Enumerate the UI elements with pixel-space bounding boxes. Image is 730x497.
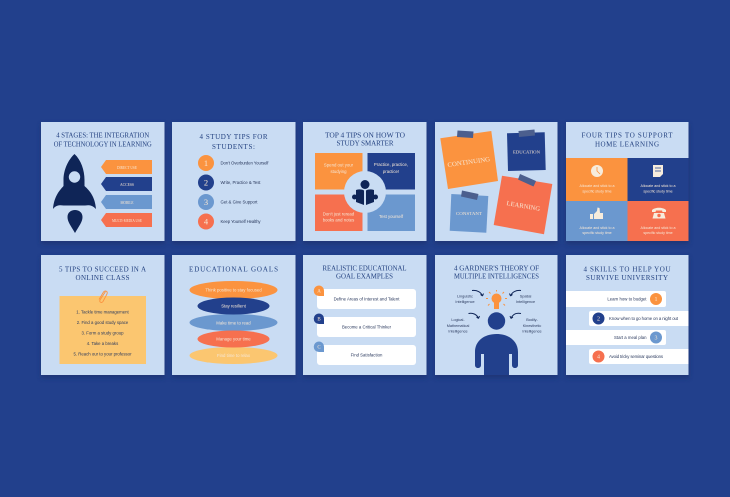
icon: paperclip bbox=[99, 291, 107, 302]
tip box: practice bbox=[368, 153, 415, 190]
arrow banner: multi-media use: MULTI-MEDIA USE bbox=[112, 219, 143, 223]
goal ellipse 5: Find time to relax bbox=[217, 353, 251, 358]
heading: home learning bbox=[582, 132, 673, 148]
goal ellipse 4: Manage your time bbox=[216, 336, 251, 342]
heading: home learning: HOME LEARNING bbox=[595, 140, 659, 148]
tip box: practice: Practice, practice, bbox=[374, 162, 408, 167]
note: education: EDUCATION bbox=[513, 150, 541, 154]
tile: clock: specific study time bbox=[582, 190, 612, 194]
label: linguistic: Linguistic bbox=[457, 294, 473, 298]
list item 3 bbox=[198, 194, 258, 210]
heading: study smarter: TOP 4 TIPS ON HOW TO bbox=[325, 132, 405, 140]
list item 4: Keep Yourself Healthy bbox=[220, 219, 261, 224]
list item 3: 3 bbox=[204, 197, 208, 207]
arrows bbox=[468, 290, 521, 318]
panel: 5 tips to succeed in online class bbox=[41, 255, 164, 375]
skill row 2: Know when to go home on a night out bbox=[609, 316, 679, 321]
panel: sticky notes bbox=[435, 122, 558, 241]
panel: 4 study tips for students bbox=[172, 122, 296, 241]
list item 4 bbox=[198, 214, 261, 230]
tip box: practice: practice! bbox=[383, 169, 399, 174]
icon: reader badge bbox=[344, 171, 386, 213]
heading: study tips: STUDENTS: bbox=[212, 143, 255, 151]
note: continuing: CONTINUING bbox=[447, 156, 491, 169]
list item 2 bbox=[198, 174, 261, 190]
heading: online class: 5 TIPS TO SUCCEED IN A bbox=[59, 266, 146, 274]
tile: telephone bbox=[628, 201, 688, 241]
heading: study smarter: STUDY SMARTER bbox=[336, 140, 394, 148]
heading: goal examples bbox=[322, 264, 406, 280]
heading: 4 stages: 4 STAGES: THE INTEGRATION bbox=[56, 132, 149, 140]
heading: home learning: FOUR TIPS TO SUPPORT bbox=[582, 132, 673, 140]
skill row 2: 2 bbox=[597, 316, 600, 322]
goal row B: B bbox=[317, 318, 321, 322]
tile: notes: specific study time bbox=[643, 190, 673, 194]
panel: educational goals bbox=[172, 255, 296, 375]
skill row 4 bbox=[589, 349, 688, 364]
heading: 4 stages: OF TECHNOLOGY IN LEARNING bbox=[54, 140, 152, 148]
skill row 1: Learn how to budget bbox=[607, 296, 647, 302]
goal row A bbox=[314, 286, 416, 309]
icon: light bulb bbox=[486, 290, 507, 309]
label: logical-mathematical: Intelligence bbox=[448, 330, 468, 334]
heading: study tips: 4 STUDY TIPS FOR bbox=[200, 133, 268, 141]
panel: 4 skills to help you survive university bbox=[566, 255, 688, 375]
goal row A: Define Areas of Interest and Talent bbox=[334, 296, 400, 302]
goal row C bbox=[314, 342, 416, 365]
label: linguistic: Intelligence bbox=[455, 300, 475, 304]
list item 1 bbox=[198, 155, 269, 171]
yellow note list: 2. Find a good study space bbox=[77, 320, 129, 325]
panel: top 4 tips on how to study smarter bbox=[303, 122, 426, 241]
skill row 1 bbox=[566, 291, 666, 307]
tip box: don't just reread: books and notes bbox=[323, 218, 354, 222]
goal row C: C bbox=[317, 346, 321, 350]
yellow note list: 4. Take a breaks bbox=[87, 341, 118, 346]
tile: notes bbox=[628, 158, 688, 201]
heading: goals: EDUCATIONAL GOALS bbox=[189, 266, 278, 274]
goal row B: Become a Critical Thinker bbox=[342, 324, 392, 330]
heading: multiple intelligences: MULTIPLE INTELLIGENCES bbox=[454, 272, 539, 280]
list item 1: Don't Overburden Yourself bbox=[220, 160, 269, 166]
label: bodily-kinesthetic: Bodily- bbox=[526, 318, 538, 322]
list item 2: Write, Practice & Test bbox=[220, 180, 261, 185]
tip box: spend bbox=[315, 153, 362, 190]
tip box: spend: Spend out your bbox=[324, 162, 354, 168]
skill row 3 bbox=[566, 330, 666, 345]
label: bodily-kinesthetic: Intelligence bbox=[522, 330, 542, 334]
heading: 4 stages bbox=[54, 132, 152, 148]
heading: study smarter bbox=[325, 132, 405, 148]
arrow banner: mobile: MOBILE bbox=[120, 201, 134, 205]
panel: realistic educational goal examples bbox=[303, 255, 426, 375]
panel: Gardner's multiple intelligences bbox=[435, 255, 558, 375]
list item 1: 1 bbox=[204, 158, 208, 168]
yellow note list: 1. Tackle time management bbox=[76, 310, 130, 314]
goal ellipse 2: Stay resilient bbox=[221, 304, 247, 308]
heading: goal examples: REALISTIC EDUCATIONAL bbox=[322, 264, 406, 272]
heading: survive university: 4 SKILLS TO HELP YOU bbox=[584, 266, 670, 274]
heading: online class bbox=[59, 266, 146, 282]
skill row 1: 1 bbox=[654, 297, 658, 303]
tile: clock: Allocate and stick to a bbox=[580, 184, 614, 188]
tile: telephone: Allocate and stick to a bbox=[641, 226, 675, 230]
goal row C: Find Satisfaction bbox=[351, 352, 383, 358]
tile: thumbs up: Allocate and stick to a bbox=[580, 226, 614, 230]
heading: survive university: SURVIVE UNIVERSITY bbox=[586, 274, 668, 282]
label: logical-mathematical: Logical- bbox=[451, 318, 465, 322]
tile: clock bbox=[566, 158, 628, 201]
list item 3: Get & Give Support bbox=[220, 200, 258, 204]
tip box: don't just reread bbox=[315, 194, 362, 231]
heading: multiple intelligences bbox=[454, 264, 539, 280]
tile: thumbs up: specific study time bbox=[582, 231, 612, 235]
tip box: spend: studying bbox=[330, 169, 347, 174]
heading: multiple intelligences: 4 GARDNER'S THEORY OF bbox=[454, 264, 539, 272]
icon: rocket bbox=[53, 154, 96, 233]
yellow note list: 5. Reach our to your professor bbox=[73, 352, 132, 356]
skill row 4: Avoid tricky seminar questions bbox=[609, 354, 663, 359]
arrow banner: direct use: DIRECT USE bbox=[117, 166, 138, 170]
label: bodily-kinesthetic: Kinesthetic bbox=[523, 324, 541, 328]
heading: study tips bbox=[200, 133, 268, 151]
label: spatial: Spatial bbox=[520, 294, 531, 298]
heading: goal examples: GOAL EXAMPLES bbox=[336, 272, 393, 280]
list item 2: 2 bbox=[204, 178, 208, 188]
icon: person bbox=[475, 312, 518, 375]
panel: 4 stages integration of technology bbox=[41, 122, 164, 241]
arrow banner: access: ACCESS bbox=[120, 183, 134, 187]
tile: telephone: specific study time bbox=[643, 231, 673, 235]
note: constant: CONSTANT bbox=[456, 211, 482, 216]
goal row B bbox=[314, 314, 416, 337]
panel: four tips to support home learning bbox=[566, 122, 688, 241]
tip box: don't just reread: Don't just reread bbox=[323, 212, 355, 216]
tile: notes: Allocate and stick to a bbox=[641, 184, 675, 188]
tile: thumbs up bbox=[566, 201, 628, 241]
label: spatial: Intelligence bbox=[516, 300, 535, 304]
yellow note list bbox=[60, 296, 146, 364]
heading: online class: ONLINE CLASS bbox=[76, 274, 130, 282]
heading: survive university bbox=[584, 266, 670, 282]
skill row 3: Start a meal plan bbox=[614, 335, 647, 340]
skill row 3: 3 bbox=[654, 336, 658, 342]
goal ellipse 1: Think positive to stay focused bbox=[205, 288, 262, 292]
label: logical-mathematical: Mathematical bbox=[447, 324, 469, 328]
skill row 4: 4 bbox=[597, 354, 600, 360]
skill row 2 bbox=[589, 311, 688, 326]
note: learning: LEARNING bbox=[506, 200, 541, 213]
goal ellipse 3: Make time to read bbox=[216, 320, 251, 326]
list item 4: 4 bbox=[204, 216, 209, 226]
yellow note list: 3. Form a study group bbox=[81, 330, 124, 336]
tip box: test yourself: Test yourself bbox=[379, 214, 404, 219]
goal row A: A bbox=[317, 290, 321, 294]
